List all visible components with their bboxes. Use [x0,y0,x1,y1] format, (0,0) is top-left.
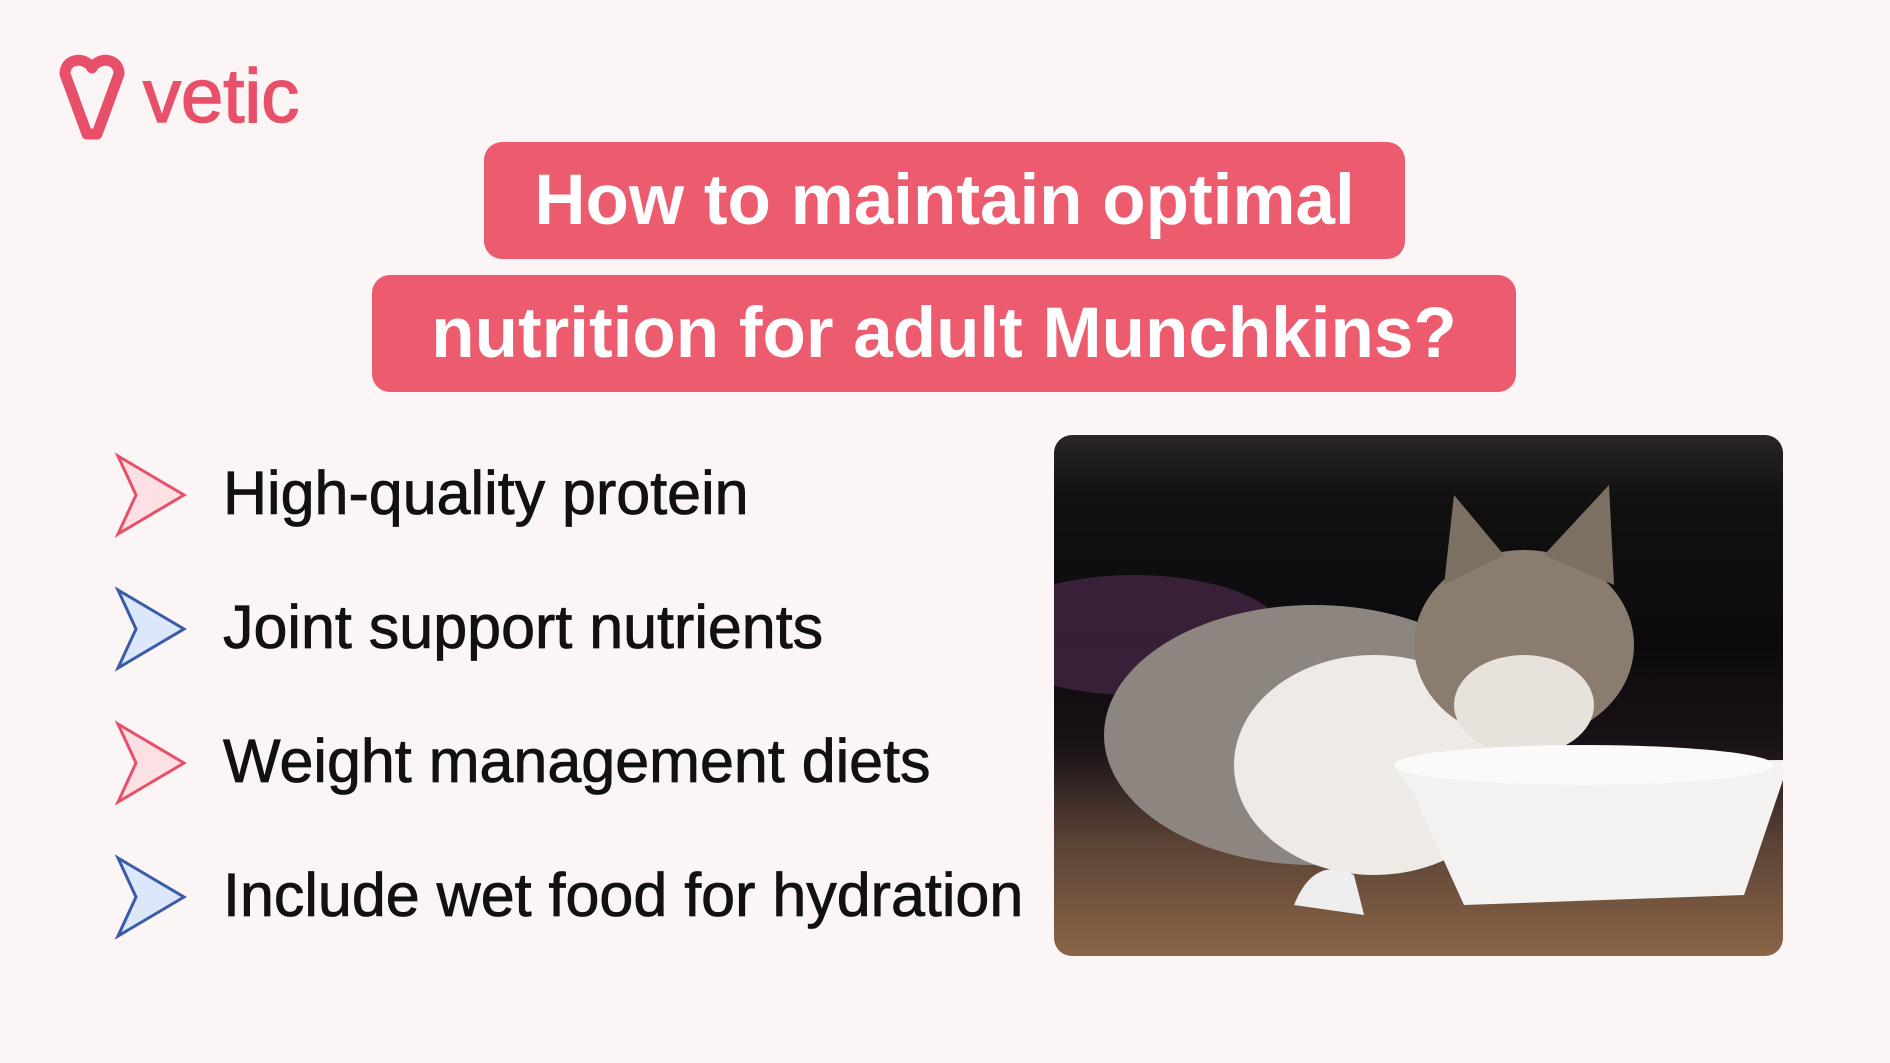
bullet 2: Joint support nutrients [223,593,823,661]
logo: vetic [143,54,299,139]
title line 2 [372,275,1516,392]
bullet 3: Weight management diets [223,727,931,795]
title line 1: How to maintain optimal [534,161,1355,240]
bullet 3 [114,720,931,806]
bullet 4 [114,854,1023,940]
bullet 4: Include wet food for hydration [223,861,1023,929]
bullet 1: High-quality protein [223,459,749,527]
bullet 1 [114,452,749,538]
bullet 2 [114,586,823,672]
title line 1 [484,142,1405,259]
title line 2: nutrition for adult Munchkins? [431,294,1457,373]
photo: kitten eating [1054,435,1783,956]
logo [60,54,299,140]
